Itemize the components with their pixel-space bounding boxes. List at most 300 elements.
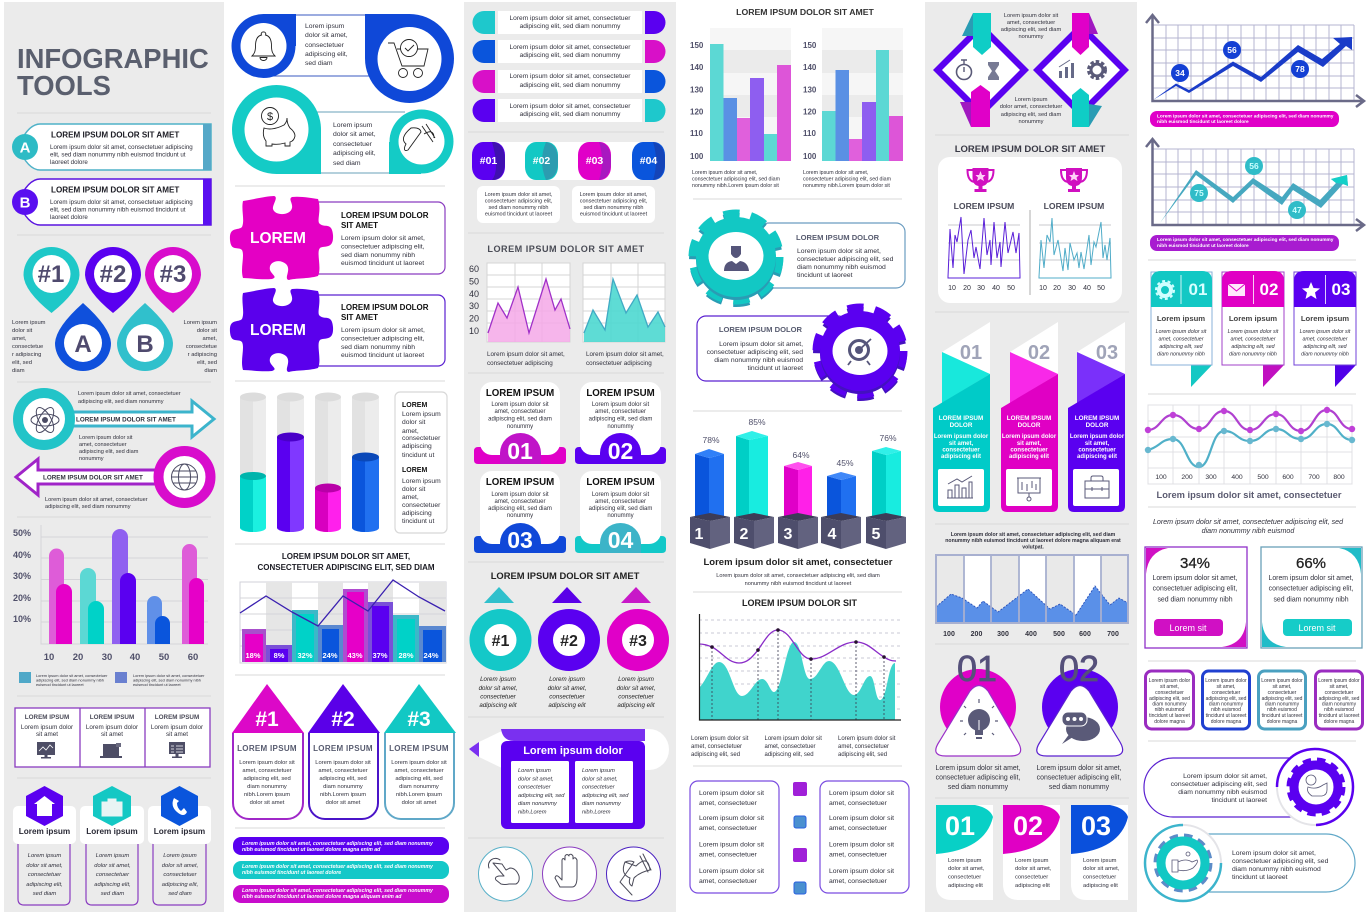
four small cards: adipiscing elit, sed xyxy=(1206,696,1247,702)
tab card 02: adipiscing elit xyxy=(1015,883,1050,889)
text pills: nibh euismod tincidunt ut laoreet dolore xyxy=(242,870,341,876)
panel: cylinder notes: LOREM xyxy=(402,467,427,474)
map pins: #1 xyxy=(38,261,64,288)
arrow: atom right: Lorem ipsum dolor sit xyxy=(79,435,133,441)
chart: rising arrow teal: 56 xyxy=(1249,161,1259,171)
panel: arrow card 2: nibh.Lorem ipsum xyxy=(320,792,366,798)
panel: trophy charts: 40 xyxy=(1083,285,1091,292)
four small cards: dolore magna xyxy=(1324,719,1355,725)
text pills xyxy=(233,837,449,903)
heading: double bar chart: LOREM IPSUM DOLOR SIT AMET xyxy=(736,7,875,17)
legend xyxy=(19,672,205,687)
chart: two wave lines: Lorem ipsum dolor sit amet, consectetuer xyxy=(1157,490,1342,500)
panel: violet gear pill: tincidunt ut laoreet xyxy=(1211,797,1267,804)
text: area chart caption: Lorem ipsum dolor sit amet, consectetuer adipiscing elit, sed diam xyxy=(951,532,1116,538)
panel: violet puzzle xyxy=(230,288,445,372)
chart: two wave lines xyxy=(1145,405,1355,500)
panel: folder 03 xyxy=(1068,322,1125,512)
ring steps: consectetuer xyxy=(618,694,655,700)
panel: three column table: Lorem ipsum dolor xyxy=(21,724,73,731)
panel: legend boxes: Lorem ipsum dolor sit xyxy=(699,868,764,875)
panel: teal gear callout: Lorem ipsum dolor sit amet, xyxy=(797,248,881,255)
map pins: #2 xyxy=(100,261,126,288)
heading: area charts: LOREM IPSUM DOLOR SIT AMET xyxy=(487,244,645,254)
panel: cylinder notes xyxy=(395,392,447,533)
panel: hex cards: sed diam xyxy=(33,891,56,897)
map pins: r adipiscing xyxy=(188,352,217,358)
panel: cylinder notes: tincidunt ut xyxy=(402,452,434,459)
panel: hex cards: adipiscing elit, xyxy=(162,882,198,888)
panel: teal pill xyxy=(232,85,454,174)
arrow: atom right: LOREM IPSUM DOLOR SIT AMET xyxy=(76,416,176,424)
text pill: violet xyxy=(1150,235,1339,251)
panel: arrow card 3: #3 xyxy=(407,708,431,731)
arrow: globe left xyxy=(16,451,210,510)
panel: magenta puzzle: euismod tincidunt ut laoreet xyxy=(341,260,424,267)
bar chart: right: 110 xyxy=(803,129,816,138)
ring steps: dolor sit amet, xyxy=(479,685,517,692)
panel: folder 01: 01 xyxy=(960,342,982,364)
panel: 34 percent xyxy=(1145,547,1247,648)
panel: trophy charts: 20 xyxy=(1053,285,1061,292)
chart: bars and line: 37% xyxy=(372,651,388,660)
triangle 02 with chat: Lorem ipsum dolor sit amet, xyxy=(1036,765,1122,772)
panel: hex cards: Lorem ipsum xyxy=(96,853,129,859)
panel: violet puzzle: Lorem ipsum dolor sit amet, xyxy=(341,327,425,334)
chart: rising arrow blue: 56 xyxy=(1227,45,1237,55)
ring steps: adipiscing elit xyxy=(617,702,655,709)
panel: arrow card 2: dolor sit amet xyxy=(326,800,361,806)
panel: arrow card 1: adipiscing elit, sed xyxy=(243,776,291,782)
panel: teal gear callout: consectetuer adipiscing elit, sed xyxy=(797,256,894,263)
note card 01: diam nonummy nibh xyxy=(1157,352,1205,358)
arrow: atom right: nonummy xyxy=(79,456,104,462)
list with half circles: adipiscing elit, sed diam nonummy xyxy=(520,52,621,59)
panel: folder 03: 03 xyxy=(1096,342,1118,364)
bar chart: percent: 20% xyxy=(13,593,31,603)
chart: 3D bars: 1 xyxy=(695,526,704,543)
panel: arrow card 1: amet, consectetuer xyxy=(242,768,292,774)
text: area chart caption xyxy=(945,532,1121,550)
panel: legend boxes: amet, consectetuer xyxy=(829,825,888,832)
legend: euismod tincidunt ut laoreet xyxy=(36,682,84,687)
title: TOOLS xyxy=(17,70,111,101)
panel: trophy charts: 10 xyxy=(1039,285,1047,292)
ring steps xyxy=(477,587,662,709)
panel: 34 percent: Lorem sit xyxy=(1169,623,1207,633)
panel: cylinder notes: LOREM xyxy=(402,402,427,409)
chart: 3D bars: 2 xyxy=(740,526,749,543)
chart: 3D bars: 3 xyxy=(784,526,793,543)
panel: magenta puzzle xyxy=(230,196,445,280)
panel: folder 02: Lorem ipsum dolor xyxy=(1002,434,1057,440)
four small cards: dolore magna xyxy=(1154,719,1185,725)
numbered cards: LOREM IPSUM xyxy=(486,388,554,399)
panel: folder 03: DOLOR xyxy=(1086,422,1109,429)
panel: folder 02: sit amet, xyxy=(1017,441,1042,447)
chart captions: consectetuer adipiscing xyxy=(487,360,553,367)
diamonds with arrows: Lorem ipsum dolor sit xyxy=(1004,13,1059,19)
panel: hex cards: adipiscing elit, xyxy=(94,882,131,888)
panel: card A: Lorem ipsum dolor sit amet, consectetuer adipiscing xyxy=(50,144,193,151)
panel: arrow card 1 xyxy=(232,684,304,819)
four small cards: Lorem ipsum dolor xyxy=(1205,678,1247,684)
pencil panel: adipiscing elit, sed xyxy=(518,793,565,799)
panel: arrow card 1: diam nonummy xyxy=(247,784,287,790)
panel: legend boxes: amet, consectetuer xyxy=(829,878,888,885)
panel: violet gear pill: Lorem ipsum dolor sit amet, xyxy=(1183,773,1267,780)
panel: teal gear pill: tincidunt ut laoreet xyxy=(1232,874,1288,881)
chart: bars and line: 18% xyxy=(245,651,261,660)
list with half circles: adipiscing elit, sed diam nonummy xyxy=(520,111,621,118)
note card 01: 01 xyxy=(1189,280,1207,299)
panel: card B xyxy=(12,179,211,225)
chart captions xyxy=(487,351,664,367)
panel: teal gear callout: diam nonummy nibh euismod xyxy=(797,264,886,271)
panel: cylinder notes: amet, xyxy=(402,428,419,435)
panel: arrow card 2 xyxy=(308,684,380,819)
note card 02: Lorem ipsum xyxy=(1229,314,1277,323)
chart: blue area: 300 xyxy=(997,631,1009,638)
panel: violet gear callout: tincidunt ut laoreet xyxy=(747,365,803,372)
chart: 3D bars: 78% xyxy=(702,435,720,445)
panel: 66 percent: 66% xyxy=(1296,555,1326,572)
map pins: amet, xyxy=(202,336,217,342)
panel: card A: A xyxy=(20,140,31,156)
chart: 3D bars xyxy=(690,417,906,587)
drum text boxes: consectetuer adipiscing elit, xyxy=(580,198,648,204)
panel: teal pill: $ xyxy=(267,111,273,123)
panel: three column table: LOREM IPSUM xyxy=(25,714,69,721)
chart: bars and line: 43% xyxy=(347,651,363,660)
text pill: magenta: nibh euismod tincidunt ut laoreet dolore xyxy=(1157,119,1249,125)
four small cards: tincidunt ut laoreet xyxy=(1262,713,1303,719)
note card 03: adipiscing elit, sed xyxy=(1303,344,1348,350)
panel: magenta puzzle: sed diam nonummy nibh xyxy=(341,252,415,259)
panel: cylinder notes: dolor sit xyxy=(402,419,426,426)
chart: blue area: 500 xyxy=(1053,631,1065,638)
note card 02: Lorem ipsum dolor sit xyxy=(1228,329,1279,335)
chart: blue area: 200 xyxy=(971,631,982,638)
four small cards: nibh euismod xyxy=(1324,707,1354,713)
tab card 01 xyxy=(936,805,993,900)
diamonds with arrows: Lorem ipsum xyxy=(1015,97,1048,103)
panel: arrow card 3: dolor sit amet xyxy=(402,800,437,806)
panel: violet puzzle: SIT AMET xyxy=(341,313,378,322)
panel: hex cards: Lorem ipsum xyxy=(154,827,205,836)
panel: teal pill: consectetuer xyxy=(333,141,373,148)
panel: card B: Lorem ipsum dolor sit amet, consectetuer adipiscing xyxy=(50,199,193,206)
triangle 01 with bulb xyxy=(935,648,1021,791)
bar chart: percent: 30 xyxy=(102,652,112,663)
panel: teal gear callout xyxy=(694,215,905,302)
triangle 01 with bulb: 01 xyxy=(957,648,997,689)
chart: two wave lines: 800 xyxy=(1333,474,1345,481)
panel: legend boxes: Lorem ipsum dolor sit xyxy=(699,842,764,848)
panel: teal gear callout: LOREM IPSUM DOLOR xyxy=(796,233,880,242)
note card 03 xyxy=(1294,271,1356,387)
numbered cards: amet, consectetuer xyxy=(595,409,646,415)
chart: wave area: adipiscing elit, sed xyxy=(691,752,740,758)
bar chart: left xyxy=(690,28,791,189)
map pins xyxy=(12,247,217,374)
pencil panel: Lorem ipsum dolor xyxy=(523,745,624,757)
four small cards: dolore magna xyxy=(1211,719,1242,725)
list with half circles: Lorem ipsum dolor sit amet, consectetuer xyxy=(510,103,631,110)
numbered cards: Lorem ipsum dolor sit xyxy=(491,402,549,408)
panel: 66 percent: sed diam nonummy nibh xyxy=(1273,596,1349,604)
panel: magenta puzzle: Lorem ipsum dolor sit amet, xyxy=(341,235,425,242)
numbered cards: amet, consectetuer xyxy=(494,499,546,505)
numbered cards: 02 xyxy=(608,438,633,464)
bar chart: right: 150 xyxy=(803,41,817,50)
ring steps: dolor sit amet, xyxy=(617,685,655,692)
list with half circles: adipiscing elit, sed diam nonummy xyxy=(520,82,621,89)
bar chart: percent: 50% xyxy=(13,528,31,538)
text: area chart caption: volutpat. xyxy=(1022,544,1044,550)
four small cards: sit amet, xyxy=(1330,684,1348,690)
bar chart: right: consectetuer adipiscing elit, sed diam xyxy=(803,176,892,182)
panel: arrow card 2: Lorem ipsum dolor sit xyxy=(315,760,371,766)
panel: trophy charts: 30 xyxy=(977,285,985,292)
tab card 01: adipiscing elit xyxy=(948,883,983,889)
panel: hex cards: Lorem ipsum xyxy=(19,827,70,836)
panel: violet gear callout: LOREM IPSUM DOLOR xyxy=(719,325,803,334)
tab card 01: Lorem ipsum xyxy=(948,858,982,864)
chart: wave area: amet, consectetuer xyxy=(764,744,816,750)
panel: three column table: sit amet xyxy=(36,731,58,738)
bar chart: percent: 10 xyxy=(44,652,54,663)
legend: adipiscing elit, sed diam nonummy nibh xyxy=(36,678,104,682)
pencil panel: consectetuer xyxy=(582,784,616,790)
tab card 03: Lorem ipsum xyxy=(1083,858,1117,864)
four small cards: adipiscing elit, sed xyxy=(1262,696,1303,702)
numbered cards: adipiscing elit, sed diam xyxy=(488,416,552,422)
legend: Lorem ipsum dolor sit amet, consectetuer xyxy=(133,673,205,678)
panel: trophy charts: 20 xyxy=(963,285,971,292)
panel: violet puzzle: euismod tincidunt ut laoreet xyxy=(341,352,424,359)
bar chart: right: nonummy nibh.Lorem ipsum dolor sit xyxy=(803,183,890,189)
drum text boxes: euismod tincidunt ut laoreet xyxy=(580,212,648,218)
panel: trophy charts: 10 xyxy=(948,285,956,292)
panel: arrow card 1: LOREM IPSUM xyxy=(237,744,297,753)
panel: teal pill: adipiscing elit, xyxy=(333,150,376,157)
panel: trophy charts: 30 xyxy=(1068,285,1076,292)
panel: arrow card 1: dolor sit amet xyxy=(250,800,285,806)
panel: cylinder notes: consectetuer xyxy=(402,502,441,509)
panel: cylinder notes: amet, xyxy=(402,494,419,501)
chart: rising arrow blue xyxy=(1146,15,1364,107)
four small cards: consectetuer xyxy=(1325,690,1354,696)
chart: two wave lines: 600 xyxy=(1282,474,1294,481)
panel: folder 01: adipiscing elit xyxy=(941,454,981,460)
pencil panel: Lorem ipsum xyxy=(582,768,615,774)
heading: trophy panel: LOREM IPSUM DOLOR SIT AMET xyxy=(955,144,1105,155)
numbered cards: nonummy xyxy=(507,513,533,519)
pencil panel: dolor sit amet, xyxy=(582,776,618,782)
panel: cylinder notes: adipiscing xyxy=(402,443,432,450)
pencil panel: adipiscing elit, sed xyxy=(582,793,629,799)
panel: teal gear pill: diam nonummy nibh euismod xyxy=(1232,866,1321,873)
map pins: A xyxy=(74,331,92,358)
panel: teal gear pill: consectetuer adipiscing elit, sed xyxy=(1232,858,1329,865)
four small cards: tincidunt ut laoreet xyxy=(1206,713,1247,719)
bar chart: left: nonummy nibh.Lorem ipsum dolor sit xyxy=(692,183,779,189)
panel: legend boxes: Lorem ipsum dolor sit xyxy=(829,868,894,875)
panel: legend boxes: Lorem ipsum dolor sit xyxy=(699,790,764,797)
diamonds with arrows: amet, consectetuer xyxy=(1007,20,1055,26)
bar chart: left: 140 xyxy=(690,63,704,72)
panel: magenta puzzle: LOREM xyxy=(250,230,306,247)
note card 02: diam nonummy nibh xyxy=(1229,352,1277,358)
tab card 01: dolor sit amet, xyxy=(948,866,985,872)
panel: card B: elit, sed diam nonummy nibh euismod tincidunt ut xyxy=(50,206,186,214)
map pins: diam xyxy=(12,368,25,374)
pencil panel: diam nonummy xyxy=(518,801,558,807)
legend: euismod tincidunt ut laoreet xyxy=(133,682,181,687)
panel: three column table: Lorem ipsum dolor xyxy=(86,724,138,731)
chart: 3D bars: Lorem ipsum dolor sit amet, consectetuer xyxy=(704,557,893,568)
panel: violet puzzle: consectetuer adipiscing elit, xyxy=(341,336,425,342)
ring steps: adipiscing elit xyxy=(479,702,517,709)
panel: cylinder notes: adipiscing xyxy=(402,510,432,517)
chart: 3D bars: 45% xyxy=(836,458,854,468)
four small cards: tincidunt ut laoreet xyxy=(1149,713,1191,719)
text pill: magenta: Lorem ipsum dolor sit amet, consectetuer adipiscing elit, sed diam nonummy xyxy=(1157,114,1334,120)
drum text boxes: Lorem ipsum dolor sit amet, xyxy=(485,192,553,198)
ring steps: Lorem ipsum xyxy=(480,676,516,683)
numbered cards: amet, consectetuer xyxy=(494,409,546,415)
panel: folder 01: sit amet, xyxy=(949,441,974,447)
map pins: dolor sit xyxy=(12,328,33,334)
arrow: atom right: adipiscing elit, sed diam xyxy=(79,449,139,455)
panel: 34 percent: Lorem ipsum dolor sit amet, xyxy=(1152,575,1238,582)
panel: blue pill: Lorem ipsum xyxy=(305,23,345,30)
chart: area left: 60 xyxy=(469,264,479,274)
chart: 3D bars: 4 xyxy=(828,526,837,543)
drum text boxes: sed diam nonummy nibh xyxy=(489,205,548,211)
chart: wave area xyxy=(691,614,901,758)
numbered cards: 04 xyxy=(608,527,633,553)
pencil panel xyxy=(469,729,669,829)
ring steps: adipiscing elit xyxy=(548,702,586,709)
four small cards: nibh euismod xyxy=(1267,707,1297,713)
ring steps: #3 xyxy=(629,633,647,650)
chart: area right xyxy=(583,263,665,342)
panel: legend boxes: amet, consectetuer xyxy=(829,800,888,807)
list with half circles: Lorem ipsum dolor sit amet, consectetuer xyxy=(510,15,631,22)
drum text boxes: sed diam nonummy nibh xyxy=(584,205,643,211)
chart: blue area: 700 xyxy=(1107,631,1119,638)
panel: teal gear callout: tincidunt ut laoreet xyxy=(797,272,853,279)
panel: legend boxes: amet, consectetuer xyxy=(699,878,758,885)
chart: wave area: amet, consectetuer xyxy=(838,744,889,750)
panel: three column table: LOREM IPSUM xyxy=(90,714,134,721)
bar chart: left: 130 xyxy=(690,86,704,94)
panel: hex cards: Lorem ipsum xyxy=(163,853,197,859)
numbered cards: nonummy xyxy=(607,513,634,519)
panel: 66 percent: consectetuer adipiscing elit, xyxy=(1269,586,1353,592)
panel: arrow card 3: amet, consectetuer xyxy=(394,768,444,774)
panel: arrow card 3 xyxy=(384,684,456,819)
panel: magenta puzzle: SIT AMET xyxy=(341,221,378,230)
chart: wave area: Lorem ipsum dolor sit xyxy=(691,736,749,742)
tab card 02: consectetuer xyxy=(1015,874,1048,880)
panel: blue pill: dolor sit amet, xyxy=(305,32,348,39)
map pins: elit, sed xyxy=(12,360,32,366)
panel: card A: elit, sed diam nonummy nibh euismod tincidunt ut xyxy=(50,152,186,158)
map pins: dolor sit xyxy=(197,328,217,334)
panel: teal pill: Lorem ipsum xyxy=(333,122,373,129)
legend: Lorem ipsum dolor sit amet, consectetuer xyxy=(36,673,108,678)
panel: three column table: Lorem ipsum dolor xyxy=(151,724,203,731)
panel: violet puzzle: LOREM IPSUM DOLOR xyxy=(341,303,429,312)
panel: blue pill: consectetuer xyxy=(305,42,345,49)
chart: rising arrow blue: 34 xyxy=(1175,68,1185,78)
panel: legend boxes: Lorem ipsum dolor sit xyxy=(829,815,894,822)
panel: violet puzzle: sed diam nonummy nibh xyxy=(341,344,415,351)
bar chart: percent: 40 xyxy=(130,652,140,663)
panel: 34 percent: consectetuer adipiscing elit, xyxy=(1153,586,1237,592)
four small cards: sit amet, xyxy=(1273,684,1291,690)
panel: violet gear callout: Lorem ipsum dolor sit amet, xyxy=(719,341,803,348)
drum text boxes: euismod tincidunt ut laoreet xyxy=(485,212,553,218)
heading: combo chart: CONSECTETUER ADIPISCING ELIT, SED DIAM xyxy=(257,563,435,572)
panel: arrow card 2: diam nonummy xyxy=(323,784,363,790)
panel: card A xyxy=(12,124,211,170)
panel: violet gear pill: diam nonummy nibh euismod xyxy=(1178,789,1267,796)
diamonds with arrows xyxy=(933,13,1129,127)
bar chart: percent: 30% xyxy=(13,571,31,581)
four small cards: consectetuer xyxy=(1212,690,1241,696)
panel: arrow card 3: Lorem ipsum dolor sit xyxy=(391,760,447,766)
chart: area left: 20 xyxy=(469,314,479,324)
tab card 03: 03 xyxy=(1081,811,1111,841)
numbered drums: #02 xyxy=(533,155,550,167)
ring steps: consectetuer xyxy=(480,694,517,700)
numbered cards: adipiscing elit, sed diam xyxy=(589,416,652,422)
four small cards: adipiscing elit, sed xyxy=(1319,696,1360,702)
icon: hand circles xyxy=(478,847,660,901)
map pins: consectetue xyxy=(12,344,43,350)
bar chart: right: 130 xyxy=(803,86,817,94)
panel: card B: laoreet dolore xyxy=(50,214,88,221)
chart: two wave lines: 700 xyxy=(1308,474,1320,481)
numbered cards: adipiscing elit, sed diam xyxy=(589,506,652,512)
four small cards: consectetuer xyxy=(1268,690,1297,696)
panel: folder 01 xyxy=(933,322,990,512)
note card 01: adipiscing elit, sed xyxy=(1159,344,1204,350)
note card 03: Lorem ipsum xyxy=(1301,314,1349,323)
bar chart: left: Lorem ipsum dolor sit amet, xyxy=(692,170,757,176)
panel: violet gear pill: consectetuer adipiscing elit, sed xyxy=(1171,781,1267,788)
panel: hex cards: consectetuer xyxy=(163,872,198,878)
text pill: violet: Lorem ipsum dolor sit amet, consectetuer adipiscing elit, sed diam nonummy xyxy=(1157,237,1334,243)
title: INFOGRAPHIC xyxy=(17,43,209,74)
chart: wave area: adipiscing elit, sed xyxy=(764,752,814,758)
pencil panel: dolor sit amet, xyxy=(518,776,554,782)
note card 03: Lorem ipsum dolor sit xyxy=(1300,329,1351,335)
note card 01 xyxy=(1151,271,1212,387)
diamonds with arrows: adipiscing elit, sed diam xyxy=(1001,112,1061,118)
title xyxy=(17,43,209,101)
panel: blue pill xyxy=(232,14,454,103)
four small cards: sit amet, xyxy=(1217,684,1235,690)
map pins: r adipiscing xyxy=(12,352,41,358)
panel: hex cards: sed diam xyxy=(101,891,124,897)
four small cards: sit amet, xyxy=(1160,684,1179,690)
four small cards: diam nonummy xyxy=(1152,702,1187,708)
